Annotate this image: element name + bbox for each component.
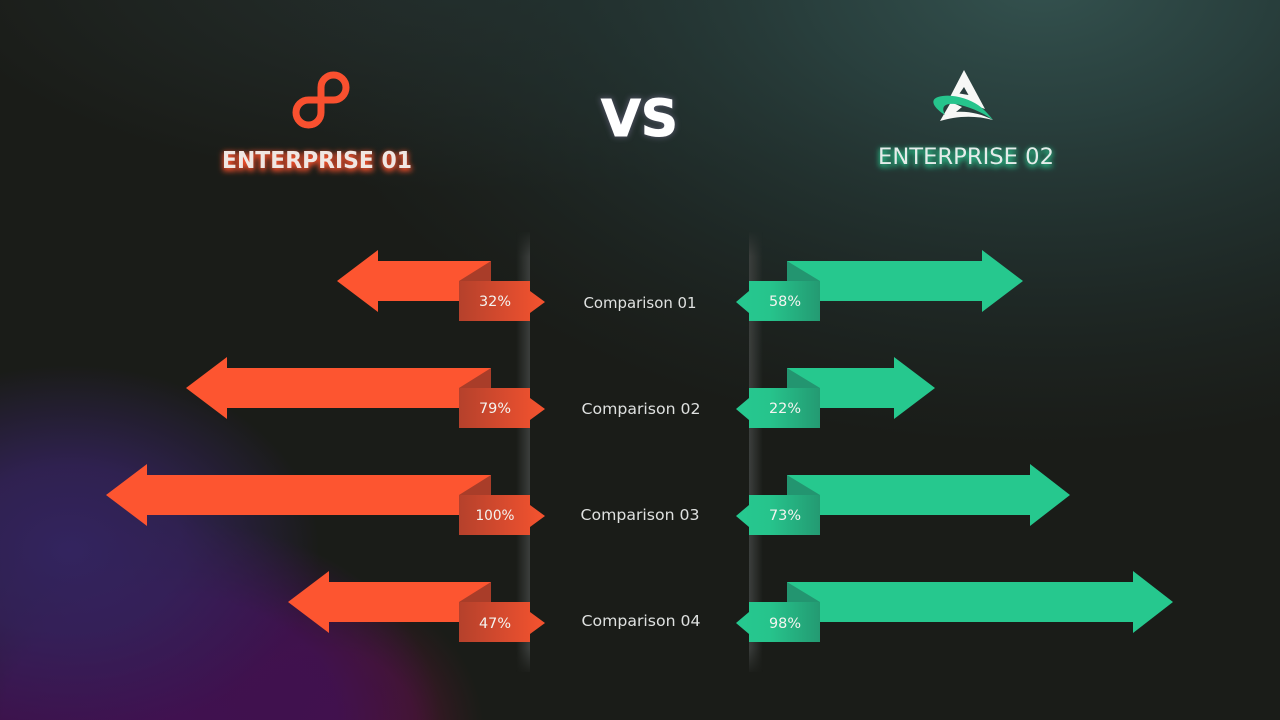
left arrow 47%: 47% <box>479 616 511 632</box>
row: comparison 01 <box>337 250 1023 321</box>
divider: left vertical shadow <box>520 238 530 668</box>
row: comparison 04 <box>288 571 1173 642</box>
icon: triangle A logo <box>933 70 993 121</box>
row: comparison 02 <box>186 357 935 428</box>
title: VS: VS <box>601 90 678 149</box>
heading: enterprise 01: ENTERPRISE 01 <box>222 148 412 174</box>
left arrow 32%: 32% <box>479 294 511 310</box>
title: VS: VS <box>601 90 678 149</box>
left arrow 79%: 79% <box>479 401 511 417</box>
left arrow 79% <box>186 357 545 428</box>
icon: infinity loop logo <box>296 75 346 125</box>
label: comparison 03: Comparison 03 <box>580 506 700 524</box>
right arrow 22%: 22% <box>769 401 801 417</box>
row: comparison 03 <box>106 464 1070 535</box>
left arrow 100% <box>106 464 545 535</box>
label: comparison 04: Comparison 04 <box>582 612 700 630</box>
right arrow 73% <box>736 464 1070 535</box>
right arrow 73%: 73% <box>769 508 801 524</box>
header: enterprise 02 <box>878 70 1054 172</box>
header: enterprise 01 <box>222 75 412 176</box>
right arrow 22% <box>736 357 935 428</box>
heading: enterprise 02: ENTERPRISE 02 <box>878 147 1054 172</box>
left arrow 32% <box>337 250 545 321</box>
heading: enterprise 01: ENTERPRISE 01 <box>222 150 412 176</box>
right arrow 98%: 98% <box>769 616 801 632</box>
left arrow 100%: 100% <box>476 508 514 524</box>
right arrow 58%: 58% <box>769 294 801 310</box>
label: comparison 01: Comparison 01 <box>584 294 696 312</box>
left arrow 47% <box>288 571 545 642</box>
right arrow 58% <box>736 250 1023 321</box>
right arrow 98% <box>736 571 1173 642</box>
heading: enterprise 02: ENTERPRISE 02 <box>878 145 1054 170</box>
divider: right vertical shadow <box>749 238 760 668</box>
label: comparison 02: Comparison 02 <box>582 400 700 418</box>
